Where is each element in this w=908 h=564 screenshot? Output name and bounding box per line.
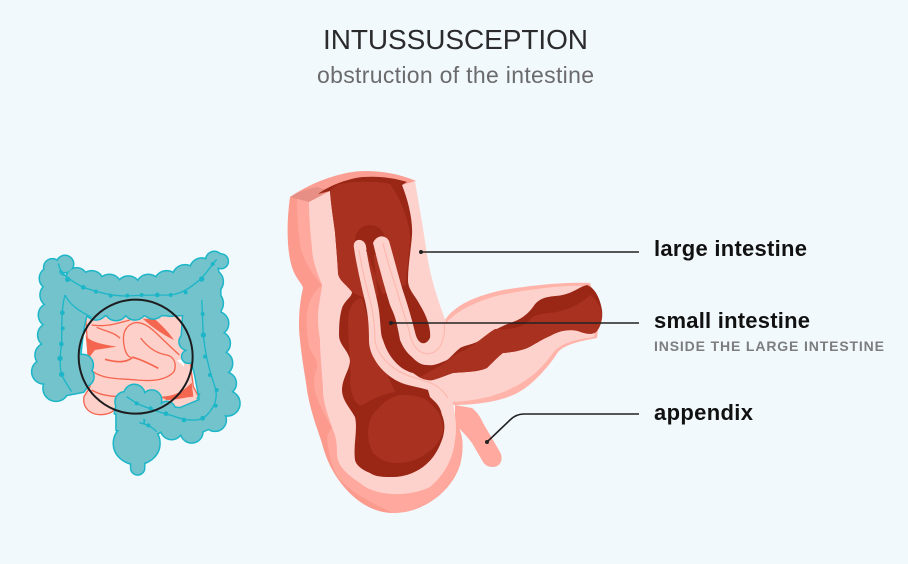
small intestine right fold and U-turn [373,236,460,365]
leader: large intestine [419,250,639,254]
taenia lines [58,259,217,432]
small intestine [84,309,201,415]
intestinal lumen [366,250,602,380]
chamber lumen [318,177,444,477]
sublabel: inside the large intestine: INSIDE THE LARGE INTESTINE [654,338,884,354]
leader: small intestine [389,321,639,325]
label: large intestine: large intestine [654,236,807,261]
subtitle: obstruction of the intestine [317,62,594,88]
leader: appendix [485,414,639,444]
magnifier circle [79,300,193,414]
right limb of bowel [440,283,600,405]
large intestine pale inner wall [309,181,456,494]
anatomical cross-section of intussusception [288,171,639,513]
title: INTUSSUSCEPTION [323,24,588,55]
small intestine band and left fold [354,240,470,402]
colon overview illustration [32,252,239,474]
large intestine outer wall [288,171,463,513]
large intestine outline and fill [32,252,239,474]
label: small intestine: small intestine [654,308,810,333]
label: appendix: appendix [654,400,754,425]
appendix [455,405,502,467]
